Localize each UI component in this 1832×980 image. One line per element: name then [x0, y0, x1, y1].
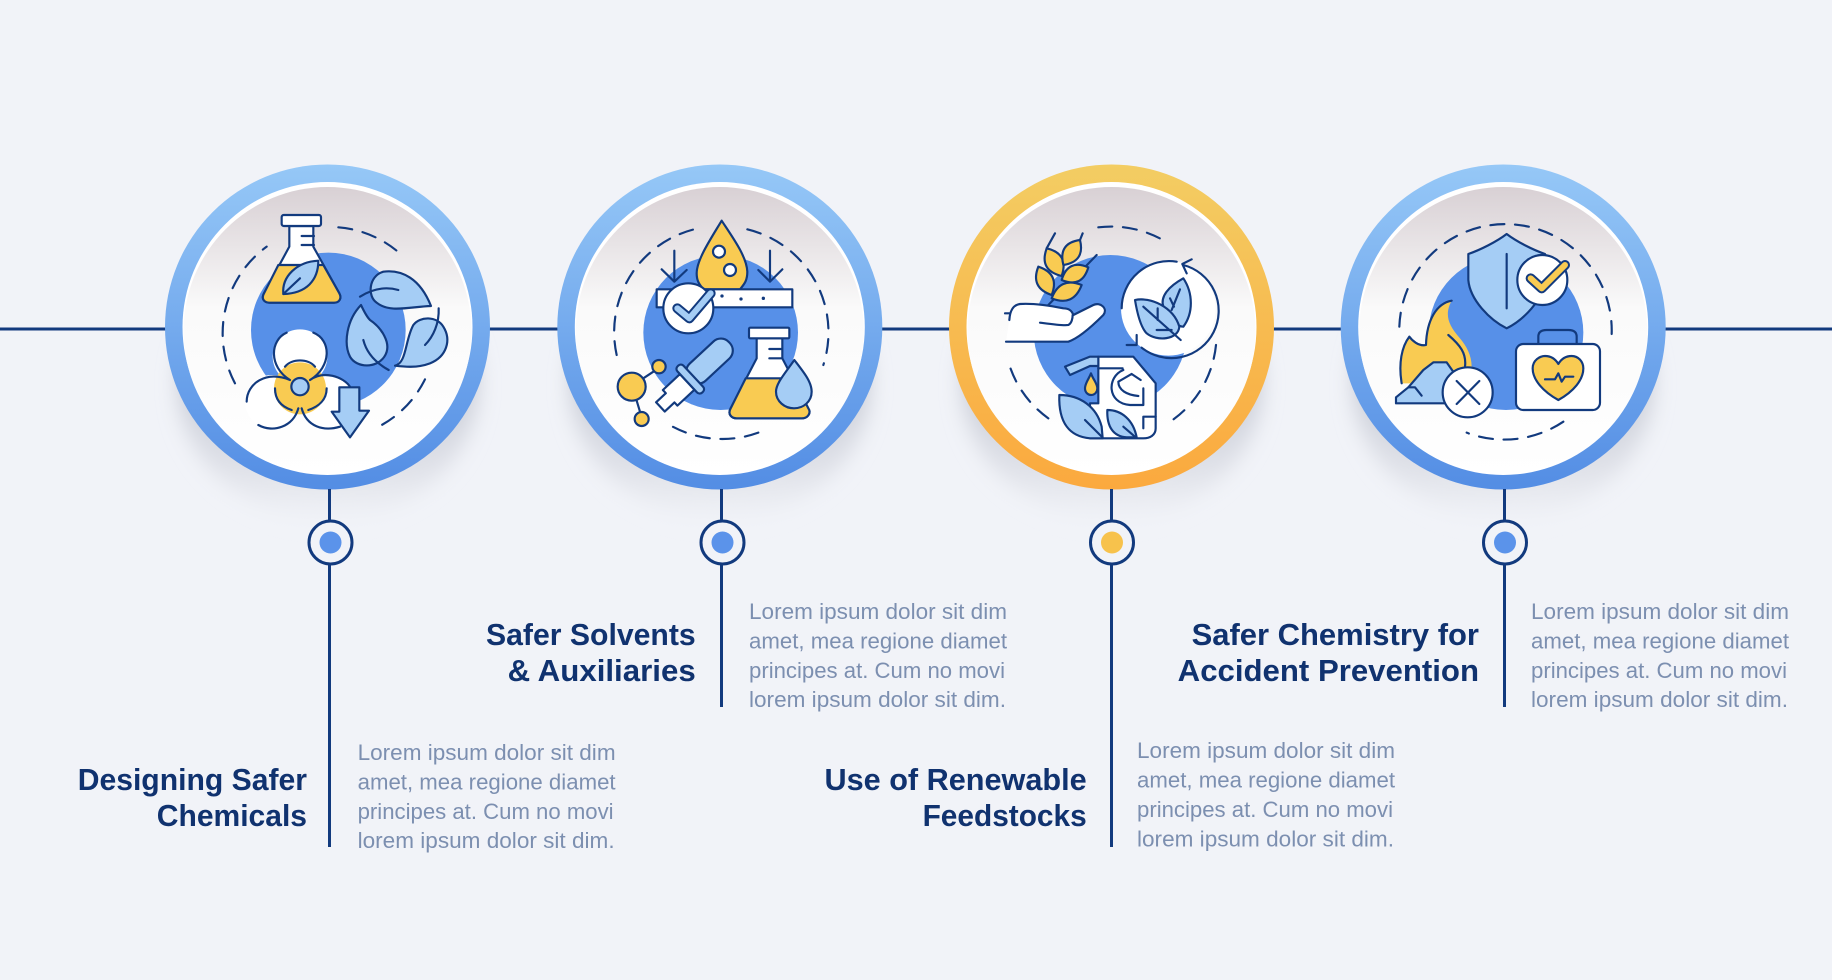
connector stem with node [701, 489, 744, 707]
panel: designing safer chemicals [78, 164, 616, 853]
panel: safer chemistry for accident prevention [1178, 164, 1790, 712]
body text: Lorem ipsum dolor sit dim [1137, 738, 1395, 763]
icon: wheat in hand, leaf cycle, fuel nozzle [1005, 227, 1219, 438]
connector stem with node [309, 489, 352, 847]
heading: Chemicals [157, 798, 307, 833]
body text: Lorem ipsum dolor sit dim [358, 740, 616, 765]
heading: Feedstocks [923, 798, 1087, 833]
body text: principes at. Cum no movi [1531, 658, 1787, 683]
icon: shield, flame, first aid kit [1396, 224, 1612, 440]
body text: amet, mea regione diamet [749, 628, 1008, 654]
heading: & Auxiliaries [508, 653, 696, 688]
body text: lorem ipsum dolor sit dim. [1531, 687, 1788, 712]
body text: principes at. Cum no movi [749, 658, 1005, 683]
body text: amet, mea regione diamet [358, 770, 616, 794]
horizontal timeline line [0, 328, 1832, 330]
body text: amet, mea regione diamet [1531, 628, 1790, 654]
icon: flask, leaves, biohazard [223, 215, 447, 437]
body text: principes at. Cum no movi [358, 799, 614, 824]
panel: safer solvents and auxiliaries [486, 164, 1008, 712]
body text: lorem ipsum dolor sit dim. [358, 828, 615, 853]
connector stem with node [1090, 489, 1134, 847]
heading: Safer Chemistry for [1192, 617, 1479, 652]
heading: Use of Renewable [824, 762, 1087, 797]
body text: lorem ipsum dolor sit dim. [749, 687, 1006, 712]
body text: lorem ipsum dolor sit dim. [1137, 826, 1394, 852]
icon: solvent filter, dropper, flask [614, 221, 828, 439]
heading: Designing Safer [78, 762, 307, 797]
body text: Lorem ipsum dolor sit dim [749, 599, 1007, 624]
heading: Accident Prevention [1178, 653, 1479, 688]
panel: use of renewable feedstocks [824, 164, 1396, 852]
connector stem with node [1484, 489, 1526, 707]
body text: principes at. Cum no movi [1137, 797, 1393, 822]
body text: amet, mea regione diamet [1137, 768, 1396, 792]
body text: Lorem ipsum dolor sit dim [1531, 599, 1789, 624]
heading: Safer Solvents [486, 617, 696, 652]
